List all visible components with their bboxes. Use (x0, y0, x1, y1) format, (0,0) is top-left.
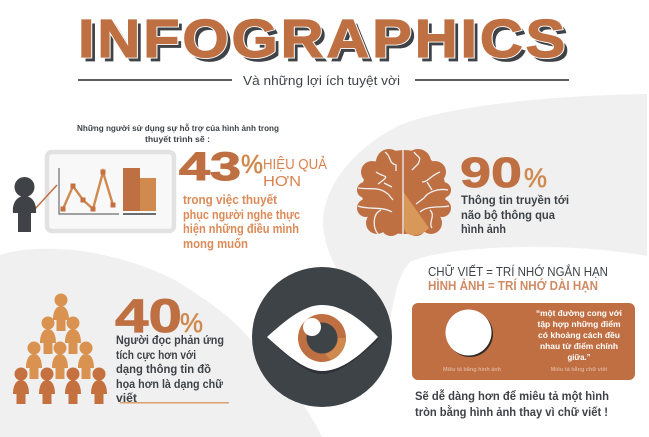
stat: 40% (115, 289, 203, 342)
quote: tập hợp những điểm (538, 319, 621, 329)
stat: 43%: 43 (179, 145, 241, 189)
intro text: Những người sử dụng sự hỗ trợ của hình ảnh trong (77, 123, 279, 133)
title: INFOGRAPHICS (78, 9, 565, 69)
text: readers respond: dạng thông tin đồ (116, 362, 211, 376)
text: persuasion: mong muốn (183, 237, 248, 251)
line chart (60, 170, 116, 212)
text: conclusion (415, 390, 609, 419)
quote: “một đường cong với (536, 308, 622, 318)
text: persuasion: trong việc thuyết (183, 193, 278, 207)
text: readers respond: viết (116, 391, 137, 405)
heading: memory comparison (428, 264, 608, 293)
icon: group of people (13, 294, 107, 404)
text: conclusion: Sẽ dễ dàng hơn để miêu tả một hình (415, 390, 609, 403)
bar chart (123, 168, 156, 215)
text: brain info (461, 193, 569, 236)
stat: 40%: 40 (115, 289, 182, 342)
intro text (77, 123, 279, 144)
text: brain info: hình ảnh (461, 222, 506, 236)
text: readers respond (116, 333, 229, 405)
stat: 90%: % (524, 163, 547, 193)
caption: image: Miêu tả bằng hình ảnh (443, 366, 502, 373)
stat: 40%: % (180, 308, 203, 338)
quote: giữa.” (568, 352, 590, 362)
stat: 43%: % (241, 149, 263, 179)
text: readers respond: Người đọc phản ứng (116, 333, 224, 347)
icon: circle (446, 310, 493, 357)
title: INFOGRAPHICS (78, 9, 565, 69)
text: brain info: não bộ thông qua (461, 208, 555, 222)
stat: 43% (179, 145, 263, 189)
text: persuasion: phục người nghe thực (183, 208, 300, 222)
heading: hiệu quả hơn: HIỆU QUẢ (263, 156, 327, 173)
icon: eye (252, 267, 392, 407)
icon: brain (357, 148, 451, 236)
icon: presenter (13, 177, 57, 232)
text: brain info: Thông tin truyền tới (461, 193, 569, 207)
heading: memory comparison: CHỮ VIẾT = TRÍ NHỚ NGẮN HẠN (428, 264, 608, 279)
text: readers respond: họa hơn là dạng chữ (116, 377, 223, 391)
panel: circle description (412, 303, 635, 380)
text: readers respond: tích cực hơn với (116, 348, 196, 362)
heading: memory comparison: HÌNH ẢNH = TRÍ NHỚ DÀI HẠN (428, 278, 598, 293)
text: conclusion: tròn bằng hình ảnh thay vì chữ viết ! (415, 406, 608, 419)
text: persuasion: hiện những điều mình (183, 222, 299, 236)
heading: hiệu quả hơn (263, 156, 327, 190)
quote (536, 308, 622, 362)
heading: hiệu quả hơn: HƠN (263, 174, 301, 190)
quote: nhau từ điểm chính (540, 341, 618, 351)
quote: có khoảng cách đều (538, 330, 620, 340)
subtitle with rules: Và những lợi ích tuyệt vời (243, 73, 400, 88)
presentation board with charts (47, 152, 174, 231)
intro text: thuyết trình sẽ : (145, 134, 210, 144)
stat: 90% (460, 149, 547, 197)
stat: 90%: 90 (460, 149, 522, 197)
caption: writing: Miêu tả bằng chữ viết (551, 366, 607, 373)
text: persuasion (183, 193, 300, 251)
title: INFOGRAPHICS (82, 13, 569, 73)
